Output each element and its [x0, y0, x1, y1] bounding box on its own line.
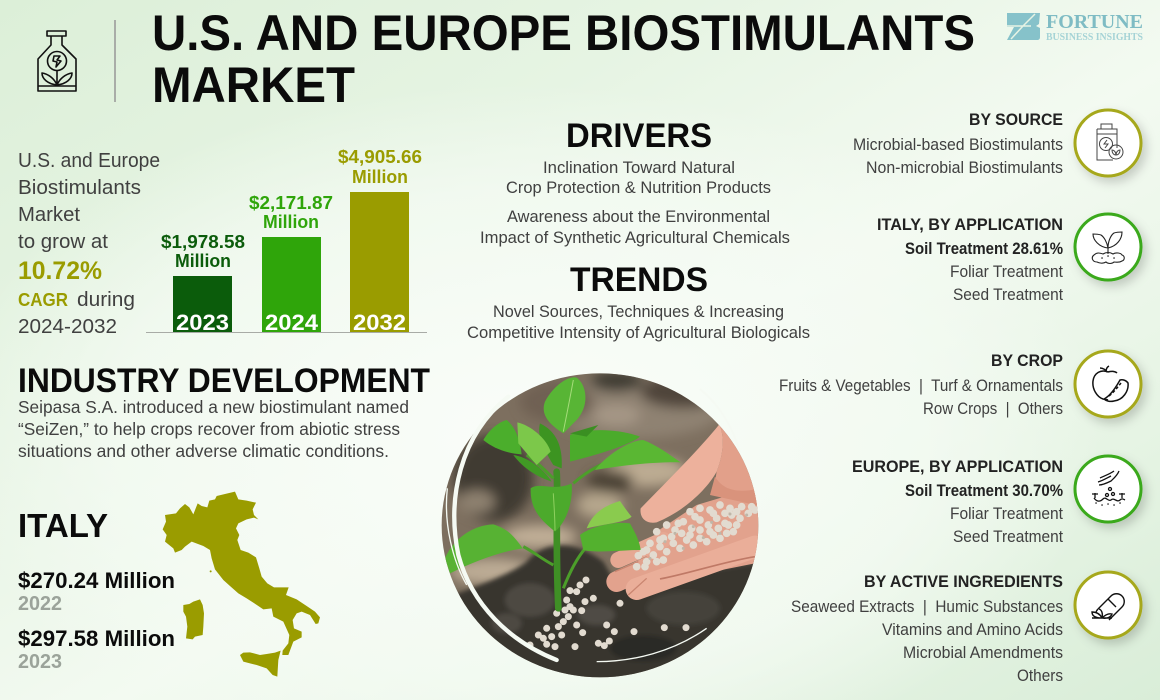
hand: [615, 424, 763, 595]
panel: by source: Microbial-based Biostimulants: [853, 136, 1063, 154]
text block: market growth statement: 2024-2032: [18, 316, 117, 338]
icon: sprout in soil: [1075, 214, 1141, 280]
bar 2032: 2032: [353, 310, 406, 335]
panel: Europe by application: EUROPE, BY APPLICATION: [852, 457, 1063, 476]
panel: by crop: [779, 351, 1063, 418]
panel: drivers: Awareness about the Environmental: [507, 208, 770, 226]
panel: Italy market values: 2022: [18, 593, 62, 615]
panel: trends: Competitive Intensity of Agricultural Biologicals: [467, 324, 810, 342]
panel: industry development: Seipasa S.A. introduced a new biostimulant named: [18, 397, 409, 417]
title: U.S. AND EUROPE BIOSTIMULANTS: [152, 5, 975, 61]
panel: trends: TRENDS: [570, 261, 708, 299]
panel: industry development: “SeiZen,” to help crops recover from abiotic stress: [18, 419, 400, 439]
panel: industry development: INDUSTRY DEVELOPMENT: [18, 362, 430, 400]
panel: by active ingredients: Microbial Amendments: [903, 644, 1063, 662]
panel: Italy by application: Foliar Treatment: [950, 263, 1063, 281]
text block: market growth statement: Market: [18, 204, 80, 226]
bar 2032: [338, 147, 422, 335]
bar 2032: Million: [352, 167, 408, 187]
title: MARKET: [152, 57, 355, 113]
panel: Italy by application: [877, 215, 1063, 304]
panel: Italy market values: $297.58 Million: [18, 626, 175, 651]
panel: drivers: Inclination Toward Natural: [543, 159, 735, 177]
photo: plant and hand holding fertilizer pellets: [442, 373, 758, 678]
text block: market growth statement: Biostimulants: [18, 177, 141, 199]
panel: by active ingredients: Others: [1017, 667, 1063, 685]
panel: drivers: [480, 117, 790, 247]
panel: Italy market values: ITALY: [18, 507, 108, 544]
icon: hand sowing seeds: [1075, 456, 1141, 522]
panel: by crop: Row Crops | Others: [923, 400, 1063, 418]
logo: Fortune Business Insights: BUSINESS INSIGHTS: [1046, 32, 1143, 43]
icon: fruit slice: [1075, 351, 1141, 417]
panel: trends: Novel Sources, Techniques & Increasing: [493, 303, 784, 321]
bar 2024: $2,171.87: [249, 193, 333, 213]
icon: bottle with plant: [38, 31, 76, 91]
icon: capsule with leaves: [1075, 572, 1141, 638]
text block: market growth statement: CAGR: [18, 290, 68, 310]
panel: industry development: situations and other adverse climatic conditions.: [18, 441, 389, 461]
header divider: [114, 20, 116, 102]
text block: market growth statement: during: [77, 289, 135, 311]
panel: drivers: DRIVERS: [566, 117, 712, 155]
bar 2024: Million: [263, 212, 319, 232]
pellets on soil: [530, 580, 686, 647]
panel: Italy market values: 2023: [18, 651, 62, 673]
panel: by source: Non-microbial Biostimulants: [866, 159, 1063, 177]
logo: Fortune Business Insights: FORTUNE: [1046, 11, 1143, 33]
text block: market growth statement: 10.72%: [18, 257, 102, 285]
text block: market growth statement: U.S. and Europe: [18, 150, 160, 172]
logo: Fortune Business Insights: [1007, 11, 1143, 43]
panel: Italy by application: Seed Treatment: [953, 286, 1063, 304]
panel: by source: BY SOURCE: [969, 110, 1063, 129]
panel: trends: [467, 261, 810, 342]
panel: Italy market values: $270.24 Million: [18, 568, 175, 593]
text block: market growth statement: to grow at: [18, 231, 108, 253]
panel: Europe by application: Foliar Treatment: [950, 505, 1063, 523]
bar 2024: 2024: [265, 310, 319, 335]
bar 2023: Million: [175, 251, 231, 271]
panel: Europe by application: [852, 457, 1063, 546]
panel: by source: [853, 110, 1063, 177]
pellets in hand: [637, 505, 755, 567]
panel: drivers: Crop Protection & Nutrition Products: [506, 179, 771, 197]
panel: Europe by application: Soil Treatment 30.70%: [905, 482, 1063, 500]
text block: market growth statement: [18, 150, 160, 338]
panel: by active ingredients: [791, 572, 1063, 685]
bar 2032: $4,905.66: [338, 147, 422, 167]
bar chart: market size: [146, 147, 427, 335]
panel: Italy by application: ITALY, BY APPLICATION: [877, 215, 1063, 234]
bar 2023: $1,978.58: [161, 232, 245, 252]
panel: Italy market values: [18, 507, 175, 673]
panel: by active ingredients: BY ACTIVE INGREDIENTS: [864, 572, 1063, 591]
icon: battery with leaf: [1075, 110, 1141, 176]
bar 2023: [161, 232, 245, 335]
map: Italy: [163, 492, 320, 677]
panel: drivers: Impact of Synthetic Agricultural Chemicals: [480, 229, 790, 247]
panel: by crop: Fruits & Vegetables | Turf & Ornamentals: [779, 377, 1063, 395]
bar 2023: 2023: [176, 310, 229, 335]
panel: by active ingredients: Vitamins and Amino Acids: [882, 621, 1063, 639]
bar 2024: [249, 193, 333, 335]
title: [152, 5, 975, 113]
white brush ring: [454, 397, 557, 660]
panel: Italy by application: Soil Treatment 28.61%: [905, 240, 1063, 258]
panel: by active ingredients: Seaweed Extracts | Humic Substances: [791, 598, 1063, 616]
panel: Europe by application: Seed Treatment: [953, 528, 1063, 546]
panel: industry development: [18, 362, 430, 461]
panel: by crop: BY CROP: [991, 351, 1063, 370]
plant: [445, 377, 681, 608]
